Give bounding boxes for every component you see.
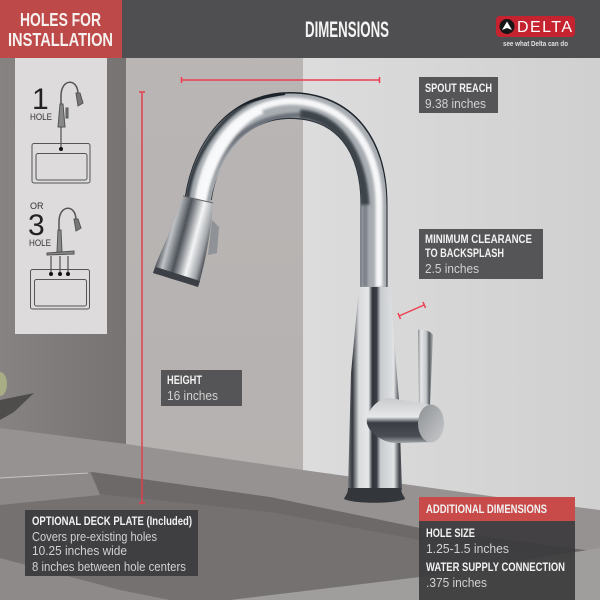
callout: minimum clearance (419, 229, 543, 279)
faucet column (348, 287, 402, 490)
faucet lever handle (418, 329, 433, 405)
additional dimensions heading: ADDITIONAL DIMENSIONS (426, 502, 547, 516)
faucet handle body (367, 398, 432, 443)
callout: spout reach (419, 77, 498, 113)
callout: height: HEIGHT (167, 373, 203, 387)
panel: additional dimensions (419, 497, 575, 600)
additional dimensions heading (419, 497, 575, 521)
heading: holes for installation: HOLES FOR (20, 10, 101, 30)
hole size: HOLE SIZE (426, 526, 475, 540)
faucet (153, 92, 444, 503)
callout: optional deck plate: Covers pre-existing holes (32, 530, 157, 544)
logo: Delta: DELTA (517, 19, 572, 36)
heading: dimensions: DIMENSIONS (305, 17, 389, 42)
callout: minimum clearance: 2.5 inches (425, 262, 479, 276)
one hole diagram (30, 82, 90, 183)
installation card (15, 58, 107, 334)
three hole diagram: HOLE (29, 238, 51, 248)
callout: optional deck plate: OPTIONAL DECK PLATE (Included) (32, 514, 192, 528)
water supply connection (426, 560, 565, 590)
callout: spout reach: SPOUT REACH (425, 81, 492, 95)
heading: holes for installation: INSTALLATION (8, 30, 113, 50)
three hole diagram (28, 201, 90, 309)
three hole diagram: OR (30, 201, 44, 211)
callout: height (161, 370, 242, 406)
logo: Delta (496, 16, 575, 48)
callout: optional deck plate (25, 510, 198, 576)
panel: holes for installation (0, 0, 122, 334)
logo: Delta: see what Delta can do (503, 41, 568, 48)
one hole diagram: HOLE (30, 112, 52, 122)
arrow: height (139, 92, 145, 503)
faucet pull-down spray head (153, 196, 219, 287)
faucet handle cap (418, 404, 444, 442)
water supply connection: WATER SUPPLY CONNECTION (426, 560, 565, 574)
callout: height: 16 inches (167, 389, 218, 403)
arrow: spout reach (182, 77, 380, 83)
heading: holes for installation (0, 0, 122, 58)
three hole diagram: 3 (28, 209, 45, 242)
hole size (426, 526, 509, 556)
top header bar (0, 0, 600, 58)
water supply connection: .375 inches (426, 576, 487, 590)
callout: minimum clearance: TO BACKSPLASH (425, 246, 504, 260)
hole size: 1.25-1.5 inches (426, 542, 509, 556)
one hole diagram: 1 (32, 83, 49, 116)
faucet base (344, 488, 405, 503)
callout: spout reach: 9.38 inches (425, 97, 486, 111)
faucet spout arch (184, 92, 388, 287)
arrow: clearance to backsplash (398, 302, 426, 319)
callout: minimum clearance: MINIMUM CLEARANCE (425, 232, 532, 246)
callout: optional deck plate: 10.25 inches wide (32, 544, 127, 558)
callout: optional deck plate: 8 inches between hole centers (32, 560, 186, 574)
